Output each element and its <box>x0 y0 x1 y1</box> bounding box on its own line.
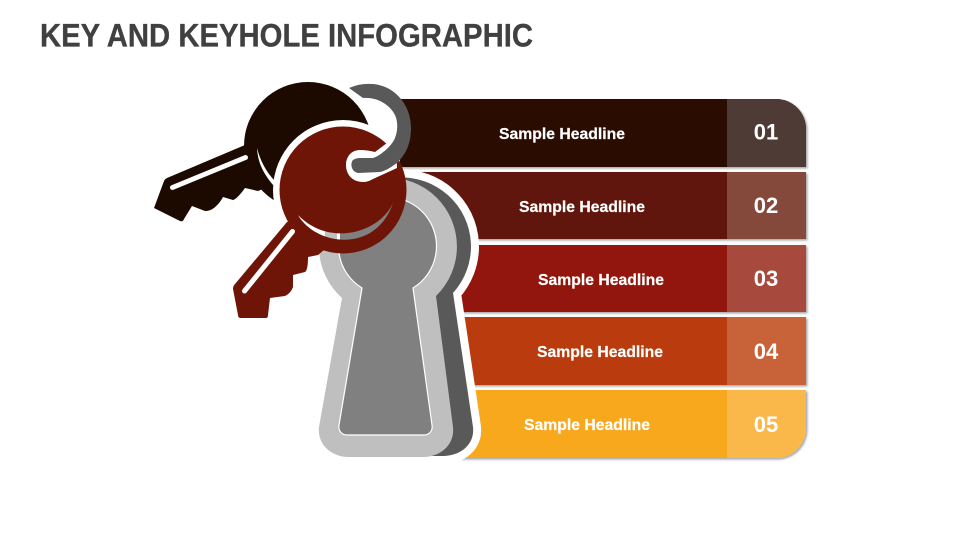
bar 04: 04 <box>754 339 779 364</box>
icon: red key <box>233 126 406 318</box>
bar 04 <box>420 317 806 385</box>
bar 05 <box>420 390 806 458</box>
key separation outline <box>273 120 413 260</box>
bar 03: Sample Headline <box>538 272 664 289</box>
icon: keyhole <box>319 178 473 457</box>
bar 04: Sample Headline <box>537 344 663 361</box>
bar 01: Sample Headline <box>499 126 625 143</box>
icon: dark key <box>154 82 372 221</box>
bar 05: Sample Headline <box>524 417 650 434</box>
icon: key ring <box>346 84 411 182</box>
bar 01 <box>400 99 806 167</box>
bar 02 <box>400 172 806 239</box>
bar 05: 05 <box>754 412 778 437</box>
bar 02: Sample Headline <box>519 199 645 216</box>
bar 02: 02 <box>754 193 778 218</box>
bar 01: 01 <box>754 120 778 144</box>
title: KEY AND KEYHOLE INFOGRAPHIC <box>40 18 533 54</box>
panel: five headline bars <box>400 99 806 458</box>
bar 03 <box>420 245 806 312</box>
bar 03: 03 <box>754 266 778 291</box>
